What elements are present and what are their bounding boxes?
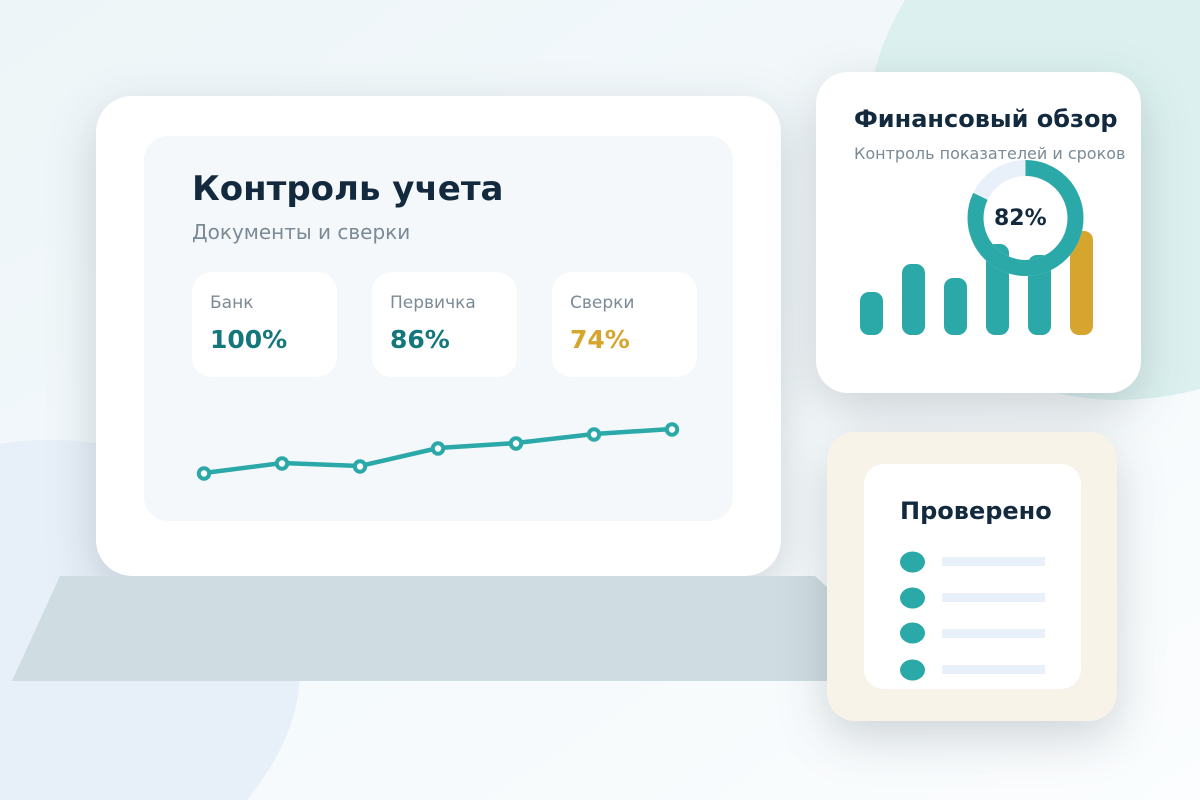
subheading: Документы и сверки bbox=[192, 220, 410, 244]
checklist sheet bbox=[864, 464, 1081, 689]
subheading: Контроль показателей и сроков bbox=[854, 144, 1125, 163]
decorative blue circle bbox=[0, 440, 300, 800]
stat card: primary documents: Первичка bbox=[390, 293, 476, 313]
panel: main dashboard card bbox=[96, 96, 781, 576]
line chart bbox=[199, 424, 677, 479]
heading: financial overview: Финансовый обзор bbox=[854, 105, 1118, 133]
stat card: bank: 100% bbox=[210, 325, 287, 354]
donut chart 82% bbox=[976, 168, 1076, 268]
bar chart bbox=[860, 231, 1093, 335]
stat card: bank bbox=[192, 272, 337, 377]
stat card: primary documents: 86% bbox=[390, 325, 450, 354]
stat card: reconciliations bbox=[552, 272, 697, 377]
decorative mint circle bbox=[866, 0, 1200, 400]
checklist rows bbox=[900, 552, 1045, 680]
laptop base bbox=[12, 576, 930, 681]
stat card: reconciliations: Сверки bbox=[570, 293, 634, 313]
stat card: reconciliations: 74% bbox=[570, 325, 630, 354]
stat card: bank: Банк bbox=[210, 293, 253, 313]
donut chart 82%: 82% bbox=[994, 206, 1047, 231]
heading: accounting control: Контроль учета bbox=[192, 169, 504, 209]
panel: financial overview bbox=[816, 72, 1141, 393]
panel: verified checklist bbox=[827, 432, 1117, 721]
inner panel bbox=[144, 136, 733, 521]
stat card: primary documents bbox=[372, 272, 517, 377]
heading: verified: Проверено bbox=[900, 497, 1052, 525]
